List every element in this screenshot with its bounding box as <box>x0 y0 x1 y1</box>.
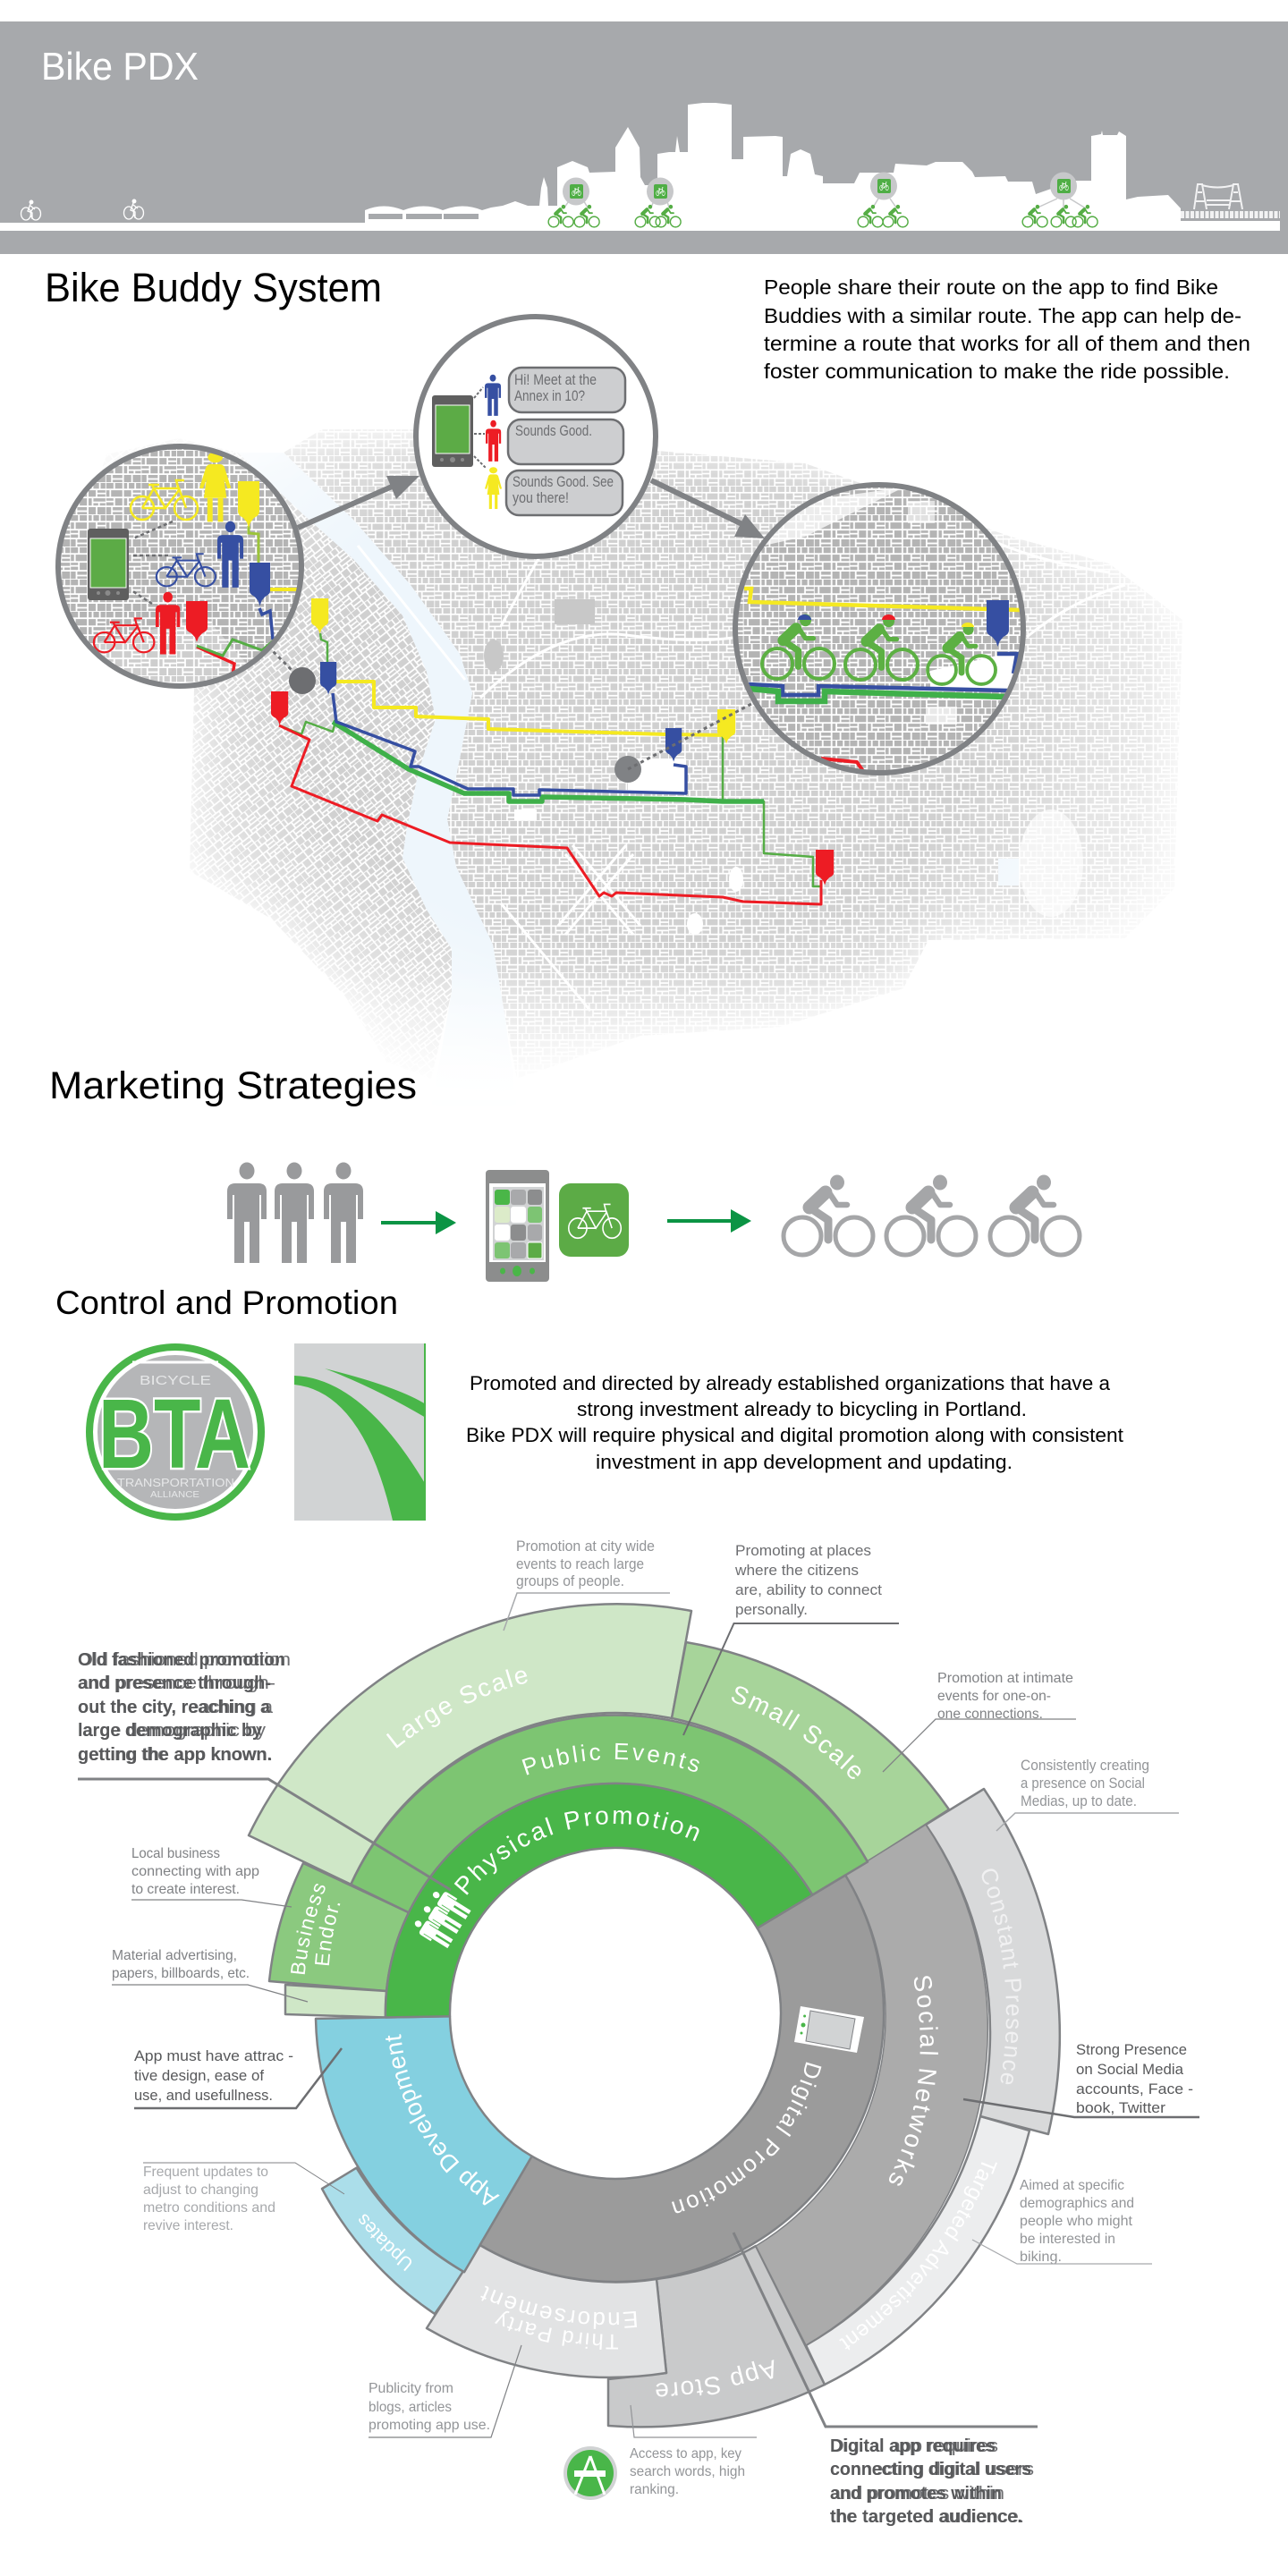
roads and parks <box>357 542 1125 1012</box>
callout: digital promotion: and promotes within <box>830 2484 1004 2504</box>
callout: targeted advertisement: biking. <box>1020 2250 1062 2265</box>
label: app development: App Development <box>386 2034 500 2206</box>
heading: Bike Buddy System: Bike Buddy System <box>45 265 382 310</box>
promotion paragraph <box>466 1372 1123 1473</box>
callout: third party <box>369 2345 521 2437</box>
callout: old fashioned promotion: Old fashioned promotion <box>78 1650 291 1670</box>
marketing flow <box>227 1163 1080 1282</box>
callout: third party: Publicity from <box>369 2381 453 2396</box>
steel bridge <box>1181 184 1280 215</box>
label: public events: Public Events <box>522 1742 699 1775</box>
chat dotted links <box>474 387 487 469</box>
sunburst chart <box>249 1604 1060 2427</box>
label: physical promotion: Physical Promotion <box>454 1810 699 1895</box>
callout: updates: revive interest. <box>143 2218 233 2233</box>
segment: large scale <box>249 1604 691 1885</box>
intro paragraph: Buddies with a similar route. The app can help de- <box>764 304 1241 327</box>
segment: app development <box>316 2016 532 2272</box>
callout: old fashioned promotion <box>78 1650 451 1890</box>
callout: app store: ranking. <box>630 2482 679 2497</box>
label: updates: Updates <box>359 2215 411 2271</box>
blue pin <box>987 600 1009 647</box>
callout: digital promotion: the targeted audience. <box>830 2507 1024 2527</box>
callout: large scale: groups of people. <box>516 1573 624 1589</box>
route: red <box>279 725 821 904</box>
icon: three people <box>227 1163 363 1263</box>
logo: Bicycle Transportation Alliance: BICYCLE <box>140 1373 211 1388</box>
yellow woman <box>199 452 231 521</box>
pin: red start <box>271 691 288 724</box>
heading: Control and Promotion: Control and Promotion <box>55 1284 398 1321</box>
chat bubble 2: Sounds Good. <box>515 422 592 439</box>
route: blue <box>333 693 686 795</box>
chat bubble 2 <box>508 419 623 464</box>
chat bubble 3: Sounds Good. See <box>513 473 614 490</box>
chat people <box>485 375 502 509</box>
sunburst labels <box>291 1669 1021 2397</box>
arrow <box>667 1209 751 1233</box>
logo: Bicycle Transportation Alliance: TRANSPORTATION <box>117 1476 234 1489</box>
label: third party: Third Party <box>495 2311 618 2350</box>
callout: material: Material advertising, <box>112 1948 237 1963</box>
promotion paragraph: Promoted and directed by already established organizations that have a <box>470 1372 1111 1394</box>
promotion paragraph: Bike PDX will require physical and digital promotion along with consistent <box>466 1424 1123 1446</box>
icon: tablet on digital ring <box>794 2006 864 2053</box>
icon: three cyclists <box>784 1175 1080 1255</box>
callout: third party: promoting app use. <box>369 2418 490 2433</box>
promotion paragraph: investment in app development and updating. <box>596 1451 1013 1473</box>
callout: large scale: Promotion at city wide <box>516 1538 655 1555</box>
label: business: Business <box>291 1884 326 1975</box>
callout: small scale: one connections. <box>937 1707 1043 1722</box>
pin: yellow start <box>311 598 328 634</box>
yellow bike <box>131 480 198 520</box>
callout: updates <box>143 2163 344 2233</box>
callout: public events: are, ability to connect <box>735 1581 882 1598</box>
callout: digital promotion <box>733 2233 1038 2527</box>
callout: social networks: Strong Presence <box>1076 2042 1187 2058</box>
segment: business vendor <box>269 1863 409 1991</box>
circle: people sharing routes <box>54 443 309 693</box>
callout: small scale: events for one-on- <box>937 1689 1051 1704</box>
callout: app store <box>630 2405 757 2497</box>
chat bubble 3: you there! <box>513 489 569 506</box>
callout: business: connecting with app <box>131 1864 259 1879</box>
callout: digital promotion: connecting digital users <box>830 2460 1034 2479</box>
callout: public events <box>683 1542 899 1735</box>
callout: business <box>131 1846 292 1907</box>
arrow: left circle to middle circle <box>298 476 419 528</box>
logo: Bicycle Transportation Alliance: ALLIANCE <box>150 1490 199 1500</box>
label: social networks: Social Networks <box>889 1976 938 2186</box>
icon: phone with app grid <box>486 1170 549 1282</box>
label: endorsement: Endorsement <box>480 2286 637 2329</box>
callout: business: Local business <box>131 1846 220 1861</box>
callout: public events: where the citizens <box>734 1562 859 1579</box>
label: endor: Endor. <box>315 1903 340 1966</box>
intro paragraph: termine a route that works for all of them and then <box>764 332 1250 355</box>
callout: targeted advertisement: be interested in <box>1020 2232 1115 2247</box>
segment: third party endorsement <box>427 2245 666 2377</box>
label: digital promotion: Digital Promotion <box>672 2063 821 2213</box>
map pins and meeting dots <box>268 598 834 886</box>
label: large scale: Large Scale <box>386 1669 528 1748</box>
callout: social networks: book, Twitter <box>1076 2100 1166 2116</box>
segment: public events <box>351 1715 868 1912</box>
callout: old fashioned promotion: and presence through- <box>78 1674 271 1693</box>
callout: app store: Access to app, key <box>630 2446 741 2462</box>
callout: large scale <box>504 1538 670 1631</box>
header banner <box>0 21 1288 254</box>
small white cyclists <box>21 199 143 220</box>
segment: social networks <box>756 1825 987 2345</box>
city map <box>190 429 1181 1054</box>
callout: app development <box>134 2047 342 2108</box>
pin: blue end <box>665 728 682 761</box>
circle: app chat <box>416 317 656 556</box>
green cyclists on skyline <box>548 205 1097 227</box>
phone <box>88 529 129 600</box>
chat phone <box>432 395 473 467</box>
circle: buddies riding together <box>733 483 1029 778</box>
callout: large scale: events to reach large <box>516 1556 644 1572</box>
callout: updates: metro conditions and <box>143 2200 275 2216</box>
segment: digital promotion <box>480 1875 884 2282</box>
blue man <box>217 521 243 588</box>
intro paragraph: foster communication to make the ride possible. <box>764 360 1230 383</box>
callout: constant presence: Medias, up to date. <box>1021 1793 1137 1809</box>
left circle routes <box>197 526 298 675</box>
segment: constant presence <box>926 1789 1060 2134</box>
segment: material <box>285 1985 386 2018</box>
dotted connectors <box>268 647 751 769</box>
pin: red end <box>816 850 834 886</box>
pin: blue start <box>320 662 336 694</box>
callout: constant presence: a presence on Social <box>1021 1775 1145 1792</box>
dot: end meeting point <box>614 756 641 783</box>
icon: bike app <box>559 1183 629 1257</box>
callout: old fashioned promotion: getting the app known. <box>78 1745 272 1765</box>
routes on map <box>279 633 821 904</box>
callout: old fashioned promotion: out the city, reaching a <box>78 1698 271 1717</box>
callout: app development: App must have attrac - <box>134 2047 293 2064</box>
callout: digital promotion: Digital app requires <box>830 2436 996 2456</box>
callout: digital promotion: and promotes within <box>830 2484 1002 2504</box>
logo: green swoosh <box>294 1343 426 1521</box>
bridge windows <box>369 214 479 219</box>
callout: old fashioned promotion: and presence through- <box>78 1674 275 1693</box>
callout: targeted advertisement: people who might <box>1020 2214 1133 2229</box>
callout: public events: personally. <box>735 1601 808 1618</box>
blue pin <box>250 563 270 606</box>
label: constant presence: Constant Presence <box>982 1869 1021 2084</box>
route: green thick <box>333 722 764 801</box>
app pods and connecting lines <box>563 172 1086 208</box>
callout: social networks: on Social Media <box>1076 2062 1184 2078</box>
callout: app development: tive design, ease of <box>134 2067 264 2084</box>
callout: targeted advertisement: Aimed at specific <box>1020 2178 1124 2193</box>
rider 2 <box>845 614 918 680</box>
callout: app store: search words, high <box>630 2464 745 2479</box>
callout: digital promotion: the targeted audience. <box>830 2507 1022 2527</box>
chat bubble 3 <box>506 470 623 515</box>
skyline silhouette <box>0 103 1280 231</box>
dotted arrows to phone <box>131 521 173 604</box>
callout: constant presence: Consistently creating <box>1021 1758 1149 1774</box>
callout: small scale <box>883 1671 1076 1772</box>
rider 1 <box>762 614 835 679</box>
route: green thin upper <box>279 633 821 886</box>
callout: old fashioned promotion: getting the app known. <box>78 1745 273 1765</box>
route: yellow <box>336 682 727 735</box>
logo: Bicycle Transportation Alliance: BTA <box>98 1379 250 1489</box>
pin: yellow end <box>717 709 735 743</box>
callout: targeted advertisement <box>972 2178 1152 2265</box>
label: small scale: Small Scale <box>732 1686 860 1779</box>
arrow <box>381 1211 456 1234</box>
red man <box>156 592 180 654</box>
promotion paragraph: strong investment already to bicycling in Portland. <box>577 1398 1027 1420</box>
title: Bike PDX: Bike PDX <box>41 45 199 89</box>
callout: social networks <box>963 2042 1199 2117</box>
label: targeted advertisement: Targeted Advertisement <box>839 2163 997 2351</box>
callout: targeted advertisement: demographics and <box>1020 2196 1134 2211</box>
callout: updates: Frequent updates to <box>143 2165 268 2180</box>
callout: app development: use, and usefullness. <box>134 2087 273 2104</box>
dot: start meeting point <box>289 667 316 694</box>
rider 3 <box>928 623 996 684</box>
callout: old fashioned promotion: out the city, reaching a <box>78 1698 274 1717</box>
segment: updates <box>322 2168 464 2314</box>
callout: material: papers, billboards, etc. <box>112 1966 250 1981</box>
logo: Bicycle Transportation Alliance <box>86 1343 265 1521</box>
blue bike <box>157 554 216 586</box>
chat bubble 1: Annex in 10? <box>514 387 585 404</box>
segment: physical promotion <box>386 1784 812 2018</box>
chat bubble 1: Hi! Meet at the <box>514 371 597 388</box>
callout: old fashioned promotion: large demographic by <box>78 1721 263 1741</box>
chat bubble 1 <box>509 368 625 412</box>
callout: digital promotion: connecting digital users <box>830 2460 1031 2479</box>
heading: Marketing Strategies: Marketing Strategies <box>49 1064 417 1107</box>
icon: people on physical ring <box>411 1886 472 1951</box>
callout: old fashioned promotion: Old fashioned promotion <box>78 1650 285 1670</box>
callout: updates: adjust to changing <box>143 2182 258 2198</box>
callout: third party: blogs, articles <box>369 2400 452 2415</box>
callout: public events: Promoting at places <box>735 1542 871 1559</box>
callout: material <box>112 1948 308 2002</box>
red pin <box>186 601 208 642</box>
callout: old fashioned promotion: large demographic by <box>78 1721 266 1741</box>
label: app store: App Store <box>657 2360 775 2397</box>
intro paragraph: People share their route on the app to find Bike <box>764 275 1218 299</box>
yellow pin <box>238 481 259 528</box>
red bike <box>94 618 154 652</box>
segment: targeted advertisement <box>806 2116 1030 2385</box>
callout: social networks: accounts, Face - <box>1076 2081 1193 2097</box>
icon: app store badge <box>564 2446 617 2500</box>
callout: constant presence <box>996 1758 1179 1831</box>
segment: small scale <box>672 1642 949 1862</box>
segment: app store <box>608 2246 825 2427</box>
right circle routes <box>744 589 1020 771</box>
callout: small scale: Promotion at intimate <box>937 1671 1073 1686</box>
intro paragraph <box>764 275 1250 383</box>
callout: digital promotion: Digital app requires <box>830 2436 998 2456</box>
callout: business: to create interest. <box>131 1882 240 1897</box>
river <box>262 461 503 1007</box>
arrow: middle circle to right circle <box>651 480 765 538</box>
